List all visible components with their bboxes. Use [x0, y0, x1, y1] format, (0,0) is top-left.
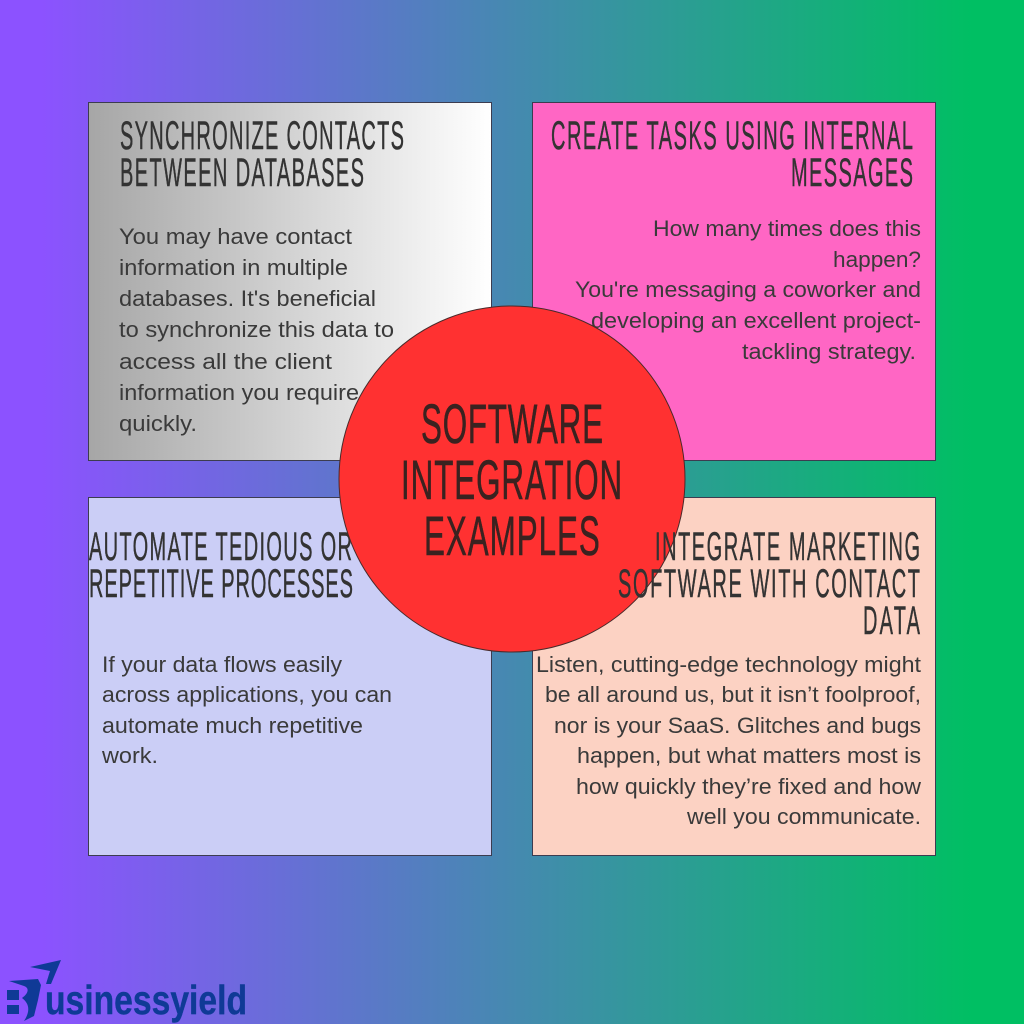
text: synchronize contacts body: information in multiple [119, 255, 348, 280]
text: automate processes body: across applications, you can [102, 682, 392, 707]
text: create tasks body: developing an excellent project- [591, 308, 921, 333]
text: integrate marketing body [536, 652, 922, 829]
text: integrate marketing body: happen, but what matters most is [577, 743, 921, 768]
icon: B with arrow [7, 960, 61, 1021]
text: synchronize contacts body: access all the client [119, 349, 333, 374]
panel: synchronize contacts [88, 102, 492, 460]
panel: create tasks [532, 102, 936, 460]
title [401, 392, 622, 567]
heading: integrate marketing [618, 523, 921, 643]
title: EXAMPLES [424, 504, 600, 567]
title: SOFTWARE [421, 392, 603, 455]
text: synchronize contacts body: databases. It's beneficial [119, 286, 376, 311]
text: synchronize contacts body [119, 224, 394, 436]
heading: integrate marketing: DATA [863, 597, 921, 643]
text: integrate marketing body: nor is your SaaS. Glitches and bugs [554, 713, 921, 738]
text: create tasks body: tackling strategy. [742, 339, 916, 364]
text: automate processes body: automate much repetitive [102, 713, 363, 738]
logo: Businessyield [7, 960, 247, 1023]
text: automate processes body: work. [101, 743, 158, 768]
heading: integrate marketing: INTEGRATE MARKETING [655, 523, 920, 569]
heading: automate processes [89, 523, 353, 606]
text: integrate marketing body: be all around us, but it isn’t foolproof, [545, 682, 921, 707]
heading: synchronize contacts: BETWEEN DATABASES [120, 149, 364, 195]
wordmark: usinessyield [45, 977, 247, 1023]
panel: automate processes [88, 498, 492, 856]
heading: integrate marketing: SOFTWARE WITH CONTACT [618, 560, 920, 606]
text: integrate marketing body: well you communicate. [686, 804, 921, 829]
heading: automate processes: AUTOMATE TEDIOUS OR [89, 523, 352, 569]
heading: create tasks: MESSAGES [791, 149, 913, 195]
center circle: title [339, 306, 685, 652]
text: automate processes body [101, 652, 392, 768]
text: create tasks body [575, 216, 921, 364]
text: integrate marketing body: how quickly they’re fixed and how [576, 774, 922, 799]
text: synchronize contacts body: information you require [119, 380, 359, 405]
text: synchronize contacts body: to synchronize this data to [119, 317, 394, 342]
heading: synchronize contacts: SYNCHRONIZE CONTACTS [120, 112, 404, 158]
heading: synchronize contacts [120, 112, 404, 195]
text: synchronize contacts body: You may have contact [119, 224, 353, 249]
text: create tasks body: How many times does this [653, 216, 921, 241]
text: integrate marketing body: Listen, cutting-edge technology might [536, 652, 922, 677]
text: automate processes body: If your data flows easily [102, 652, 343, 677]
heading: automate processes: REPETITIVE PROCESSES [89, 560, 353, 606]
heading: create tasks: CREATE TASKS USING INTERNAL [551, 112, 913, 158]
heading: create tasks [551, 112, 913, 195]
text: create tasks body: happen? [833, 247, 921, 272]
text: synchronize contacts body: quickly. [119, 411, 197, 436]
panel: integrate marketing [532, 498, 936, 856]
text: create tasks body: You're messaging a coworker and [575, 277, 921, 302]
title: INTEGRATION [401, 448, 622, 511]
